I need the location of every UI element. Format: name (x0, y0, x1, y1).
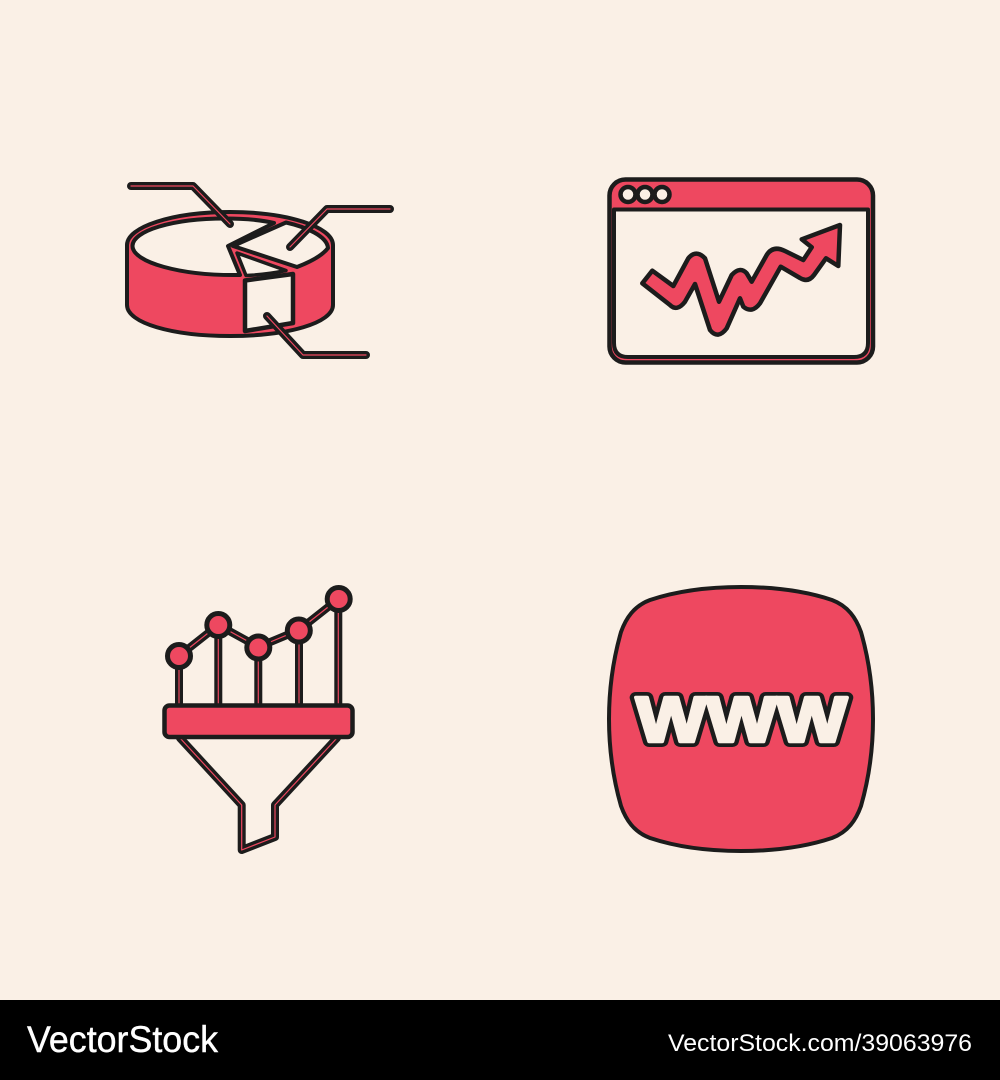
www text: WWW (636, 684, 848, 756)
footer image id: VectorStock.com/39063976 (668, 1030, 972, 1057)
leader lines (131, 186, 390, 355)
window frame (610, 180, 873, 362)
chart stems and connectors (179, 599, 338, 706)
window buttons (620, 187, 670, 202)
icon: pie chart with leader lines (127, 186, 390, 355)
pie large slice (132, 218, 274, 275)
pie right slice (233, 222, 328, 267)
rising chart arrow (642, 225, 840, 335)
footer bar (0, 1000, 1000, 1080)
pie small wedge (237, 253, 286, 276)
chart points (168, 588, 350, 668)
funnel cone (180, 738, 337, 850)
footer brand: VectorStock (27, 1019, 218, 1060)
pie cut-out square (245, 274, 293, 331)
icon: www badge (609, 587, 873, 851)
pie body (127, 212, 333, 336)
window content area (614, 210, 868, 357)
icon: browser window with rising chart (610, 180, 873, 362)
funnel rim (164, 706, 352, 737)
badge shape (609, 587, 873, 851)
icon: funnel filtering line chart (164, 588, 352, 850)
www text: WWW (636, 684, 848, 756)
